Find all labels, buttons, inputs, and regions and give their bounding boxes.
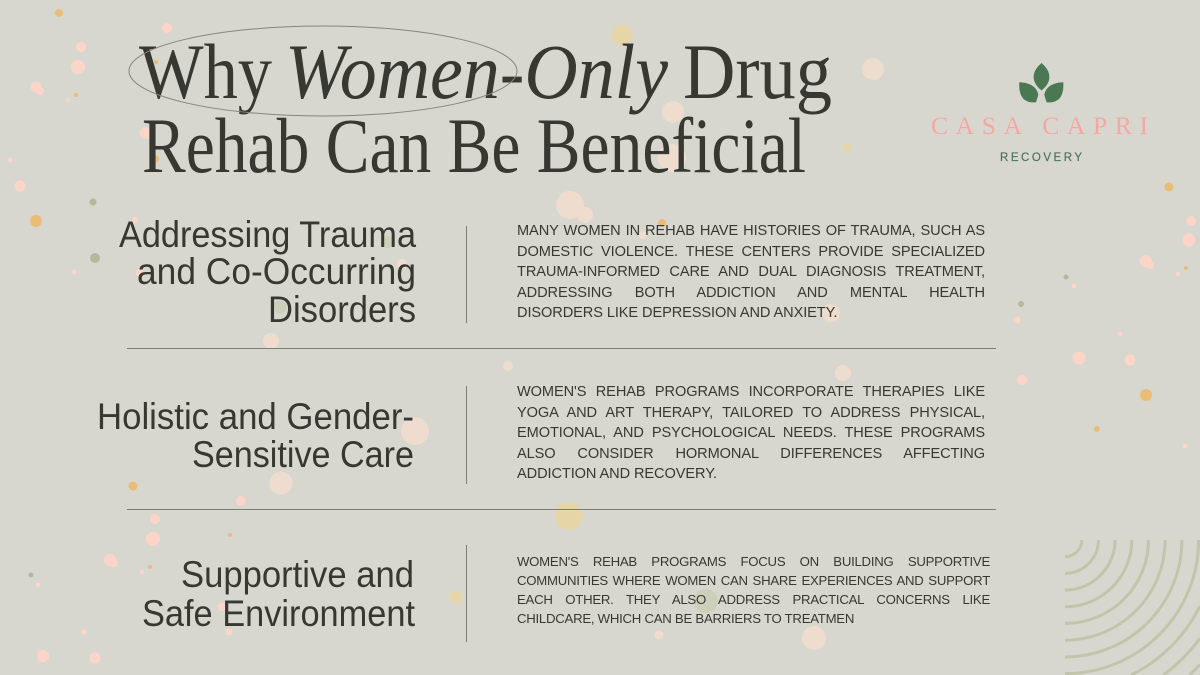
heading: addressing trauma bbox=[119, 214, 416, 330]
text block: holistic bbox=[517, 384, 985, 482]
text block: holistic: EMOTIONAL, AND PSYCHOLOGICAL NEEDS. THESE PROGRAMS bbox=[517, 425, 985, 441]
text block: supportive: CHILDCARE, WHICH CAN BE BARRIERS TO TREATMEN bbox=[517, 611, 854, 626]
text block: trauma: TRAUMA-INFORMED CARE AND DUAL DIAGNOSIS TREATMENT, bbox=[517, 264, 985, 280]
text block: holistic: ADDICTION AND RECOVERY. bbox=[517, 466, 717, 482]
title bbox=[139, 28, 832, 189]
heading: supportive environment bbox=[142, 554, 416, 634]
heading: holistic care bbox=[97, 396, 414, 475]
logo: Casa Capri Recovery: RECOVERY bbox=[1000, 152, 1082, 164]
text block: trauma: DOMESTIC VIOLENCE. THESE CENTERS PROVIDE SPECIALIZED bbox=[517, 244, 985, 260]
title: Women-Only bbox=[285, 28, 668, 115]
text block: supportive: WOMEN'S REHAB PROGRAMS FOCUS ON BUILDING SUPPORTIVE bbox=[517, 554, 990, 569]
text block: trauma: MANY WOMEN IN REHAB HAVE HISTORIES OF TRAUMA, SUCH AS bbox=[517, 223, 985, 239]
logo: Casa Capri Recovery: CASA CAPRI bbox=[931, 111, 1148, 140]
text block: holistic: ALSO CONSIDER HORMONAL DIFFERENCES AFFECTING bbox=[517, 446, 985, 462]
text block: supportive bbox=[517, 554, 990, 626]
text block: holistic: YOGA AND ART THERAPY, TAILORED TO ADDRESS PHYSICAL, bbox=[517, 404, 985, 420]
icon: three leaves bbox=[1019, 63, 1063, 102]
decorative concentric arcs bbox=[1065, 540, 1200, 675]
heading: addressing trauma: Disorders bbox=[268, 289, 416, 330]
logo: Casa Capri Recovery bbox=[931, 63, 1148, 164]
title: Drug bbox=[683, 28, 832, 115]
heading: addressing trauma: and Co-Occurring bbox=[137, 251, 416, 292]
text block: trauma: DISORDERS LIKE DEPRESSION AND ANXIETY. bbox=[517, 305, 837, 321]
dividers bbox=[127, 226, 996, 642]
text block: holistic: WOMEN'S REHAB PROGRAMS INCORPORATE THERAPIES LIKE bbox=[517, 384, 985, 400]
text block: supportive: EACH OTHER. THEY ALSO ADDRESS PRACTICAL CONCERNS LIKE bbox=[517, 592, 990, 607]
text block: trauma: ADDRESSING BOTH ADDICTION AND MENTAL HEALTH bbox=[517, 284, 985, 300]
title: Why bbox=[139, 28, 272, 115]
title highlight ellipse bbox=[128, 26, 518, 116]
text block: trauma bbox=[517, 223, 985, 321]
text block: supportive: COMMUNITIES WHERE WOMEN CAN SHARE EXPERIENCES AND SUPPORT bbox=[517, 573, 990, 588]
